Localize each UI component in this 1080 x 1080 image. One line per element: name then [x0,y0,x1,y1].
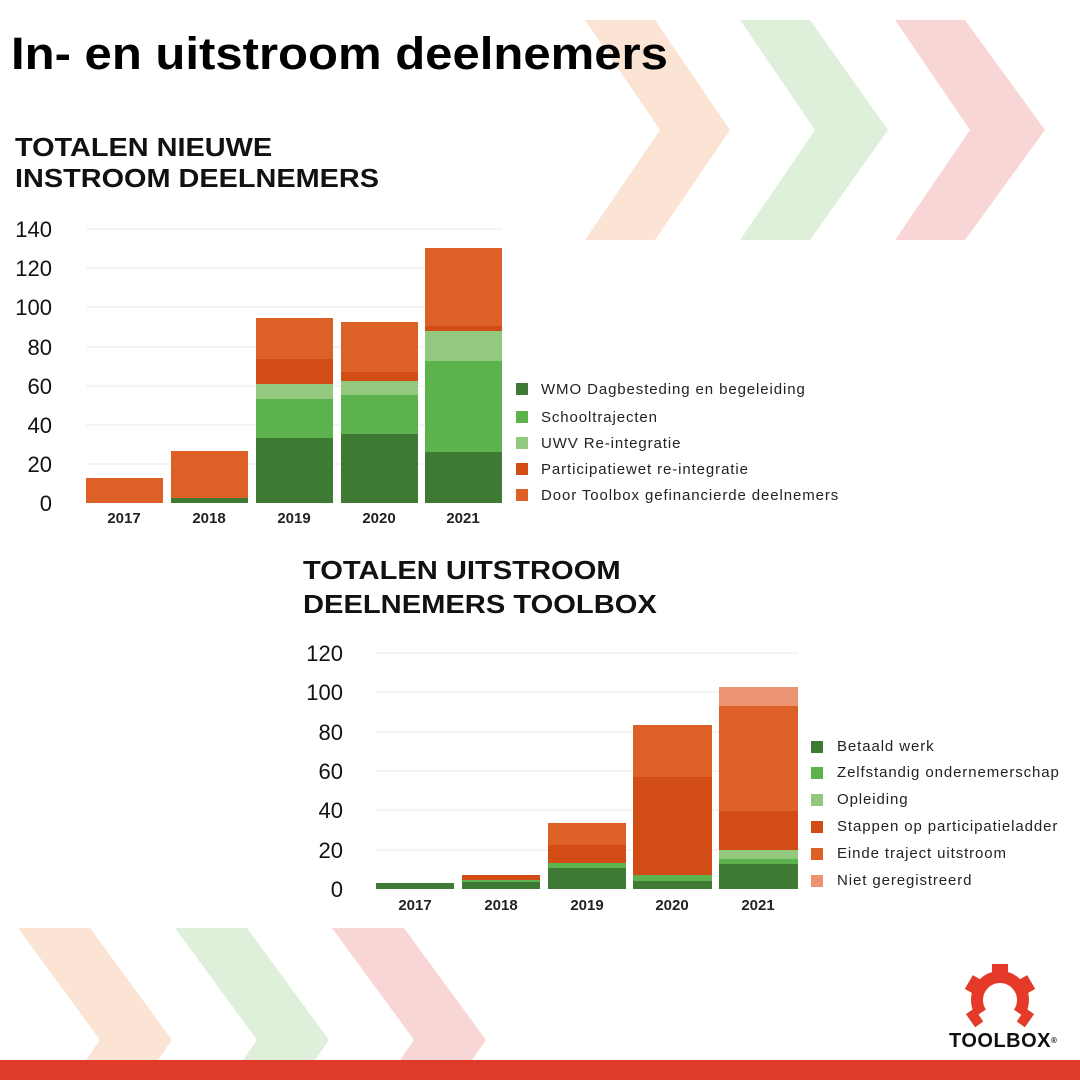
subtitle: uitstroom: DEELNEMERS TOOLBOX [303,589,657,619]
chart: uitstroom: 60 [319,759,343,784]
chart: uitstroom: Zelfstandig ondernemerschap [837,764,1060,781]
chart: uitstroom: 2020 [655,897,689,914]
chart: uitstroom: 2017 [398,897,432,914]
chart: instroom: 0 [40,491,52,516]
chart: uitstroom: Einde traject uitstroom [837,845,1007,862]
chart: uitstroom: 120 [306,641,343,666]
title: In- en uitstroom deelnemers [11,28,668,79]
chart: instroom [15,217,839,527]
chart: uitstroom: Opleiding [837,791,908,808]
chart: instroom: Door Toolbox gefinancierde deelnemers [541,487,839,504]
chart: uitstroom: 2021 [741,897,775,914]
chart: uitstroom: 0 [331,877,343,902]
chart: instroom: 120 [15,256,52,281]
chart: uitstroom: 40 [319,798,343,823]
chart: instroom: 2020 [362,510,396,527]
chart: instroom: 2019 [277,510,311,527]
chart: uitstroom: 2018 [484,897,518,914]
chart: instroom: 140 [15,217,52,242]
chart: instroom: 60 [28,374,52,399]
chart: instroom: Schooltrajecten [541,409,658,426]
subtitle: instroom: INSTROOM DEELNEMERS [15,163,379,193]
subtitle: instroom: TOTALEN NIEUWE [15,132,272,162]
subtitle: uitstroom [303,555,657,619]
subtitle: instroom [15,132,379,193]
logo text: TOOLBOX® [949,1030,1057,1052]
chart: instroom: UWV Re-integratie [541,435,681,452]
chart: instroom: 80 [28,335,52,360]
chart: instroom: 2018 [192,510,226,527]
chart: uitstroom: Betaald werk [837,738,935,755]
chart: uitstroom: Niet geregistreerd [837,872,972,889]
icon: gear [965,964,1035,1028]
chart: uitstroom: 20 [319,838,343,863]
chart: uitstroom: Stappen op participatieladder [837,818,1058,835]
chart: instroom: 20 [28,452,52,477]
chart: uitstroom [306,641,1060,914]
chart: instroom: 2017 [107,510,141,527]
logo: toolbox [949,964,1057,1052]
chart: instroom: WMO Dagbesteding en begeleiding [541,381,806,398]
subtitle: uitstroom: TOTALEN UITSTROOM [303,555,621,585]
chart: uitstroom: 100 [306,680,343,705]
chart: uitstroom: 80 [319,720,343,745]
chart: instroom: Participatiewet re-integratie [541,461,749,478]
bottom red bar [0,1060,1080,1080]
chart: instroom: 2021 [446,510,480,527]
chart: instroom: 100 [15,295,52,320]
chart: instroom: 40 [28,413,52,438]
chart: uitstroom: 2019 [570,897,604,914]
